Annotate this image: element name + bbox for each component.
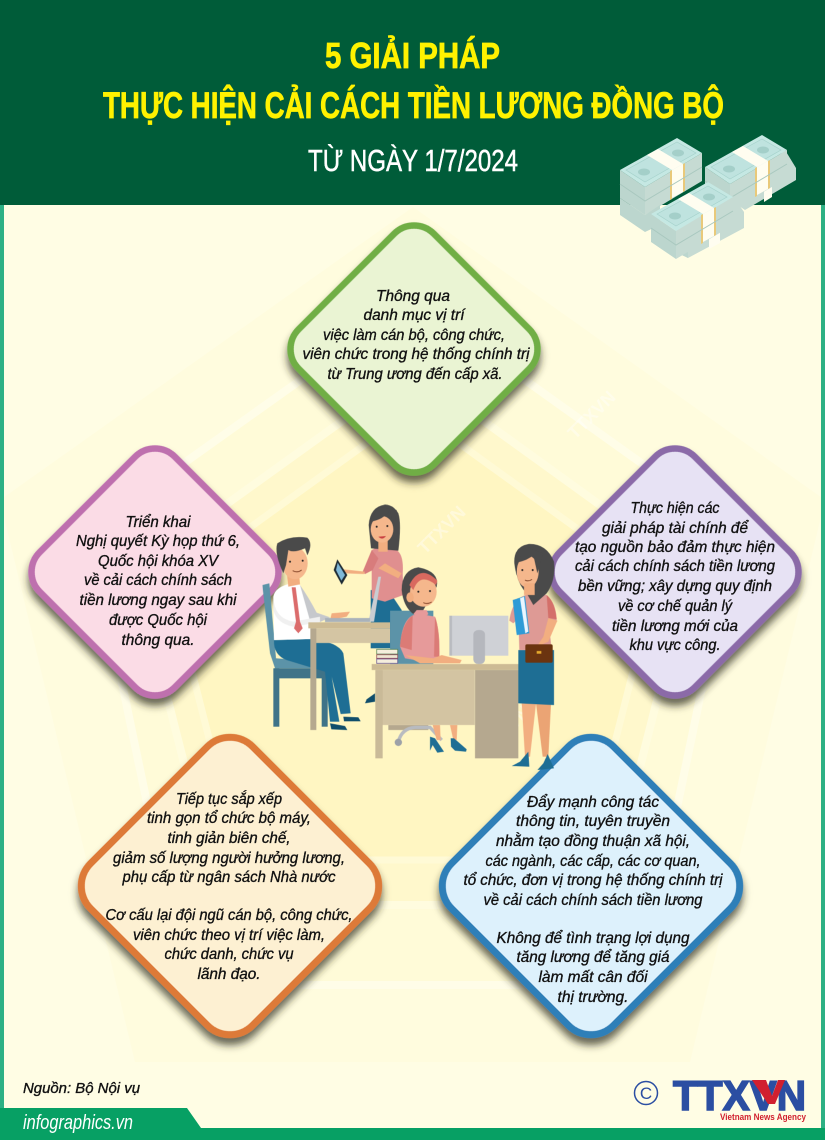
text block: bottom-right solution: [464, 793, 723, 1006]
text block: left solution: Triển khai: [126, 513, 191, 531]
panel: bottom-right solution (blue): [429, 724, 753, 1048]
logo wordmark: TTXVN: [673, 1072, 806, 1119]
header band: [0, 0, 825, 205]
watermarks: TTXVN: [414, 502, 470, 558]
text block: bottom-left solution: viên chức theo vị trí việc làm,: [133, 927, 325, 944]
panel: top solution (green): [279, 214, 549, 484]
icon: copyright: C: [640, 1084, 652, 1103]
text block: top solution: từ Trung ương đến cấp xã.: [328, 366, 502, 383]
text block: left solution: Nghị quyết Kỳ họp thứ 6,: [76, 533, 240, 550]
text block: bottom-right solution: tổ chức, đơn vị trong hệ thống chính trị: [464, 871, 723, 889]
text block: right solution: [575, 500, 775, 654]
diamond: purple: [540, 437, 810, 707]
text block: bottom-left solution: chức danh, chức vụ: [164, 946, 294, 963]
illustration: office workers: [262, 505, 557, 770]
logo: TTXVN: [634, 1072, 807, 1123]
diamond: orange: [68, 724, 392, 1048]
text block: left solution: về cải cách chính sách: [84, 572, 232, 589]
text block: bottom-right solution: về cải cách chính sách tiền lương: [484, 892, 703, 909]
watermarks: [414, 387, 620, 758]
text block: bottom-right solution: nhằm tạo đồng thuận xã hội,: [496, 831, 690, 850]
text block: bottom-left solution: phụ cấp từ ngân sách Nhà nước: [122, 869, 336, 886]
icon: stacks of money: [620, 135, 796, 259]
text block: bottom-left solution: giảm số lượng người hưởng lương,: [113, 850, 345, 867]
text block: right solution: khu vực công.: [630, 637, 720, 654]
text block: bottom-left solution: tinh gọn tổ chức bộ máy,: [147, 809, 311, 827]
text block: top solution: việc làm cán bộ, công chức,: [323, 327, 505, 344]
icon: copyright: [634, 1082, 658, 1104]
text block: top solution: danh mục vị trí: [364, 307, 466, 324]
logo tagline: Vietnam News Agency: [720, 1112, 807, 1123]
text block: bottom-right solution: làm mất cân đối: [538, 969, 648, 986]
title line 1: 5 GIẢI PHÁP: [325, 35, 500, 76]
panel: right solution (purple): [540, 437, 810, 707]
text block: bottom-left solution: Cơ cấu lại đội ngũ cán bộ, công chức,: [106, 907, 352, 924]
diamond: green: [279, 214, 549, 484]
text block: right solution: tạo nguồn bảo đảm thực hiện: [575, 539, 775, 556]
text block: left solution: Quốc hội khóa XV: [98, 553, 219, 570]
watermarks: TTXVN: [564, 387, 620, 443]
man on chair: [262, 537, 361, 730]
logo accent: [752, 1080, 785, 1104]
text block: right solution: bền vững; xây dựng quy định: [578, 578, 772, 595]
text block: bottom-left solution: lãnh đạo.: [198, 966, 260, 983]
subtitle date: TỪ NGÀY 1/7/2024: [308, 143, 518, 178]
text block: bottom-right solution: thị trường.: [558, 989, 628, 1006]
woman with books and bag: [509, 544, 557, 770]
text block: right solution: Thực hiện các: [630, 500, 720, 517]
source note: Nguồn: Bộ Nội vụ: [23, 1080, 141, 1097]
seated woman at desk: [372, 567, 519, 758]
panel: bottom-left solution (orange): [68, 724, 392, 1048]
diamond: blue: [429, 724, 753, 1048]
text block: right solution: giải pháp tài chính để: [602, 519, 749, 537]
title: [103, 35, 724, 178]
text block: bottom-right solution: tăng lương để tăng giá: [516, 948, 670, 966]
text block: top solution: viên chức trong hệ thống chính trị: [302, 346, 530, 363]
text block: bottom-right solution: Không để tình trạng lợi dụng: [496, 929, 690, 947]
text block: bottom-right solution: Đẩy mạnh công tác: [527, 793, 659, 811]
footer band: [0, 1108, 825, 1140]
text block: right solution: tiền lương mới của: [612, 618, 738, 635]
desk with laptop: [308, 577, 390, 730]
text block: bottom-right solution: thông tin, tuyên truyền: [516, 813, 670, 830]
panel: left solution (pink): [20, 437, 290, 707]
text block: top solution: Thông qua: [376, 288, 450, 305]
text block: bottom-left solution: tinh giản biên chế,: [168, 830, 290, 847]
text block: right solution: cải cách chính sách tiền lương: [575, 558, 775, 575]
text block: bottom-left solution: Tiếp tục sắp xếp: [176, 789, 282, 808]
footer site name: infographics.vn: [23, 1112, 133, 1134]
text block: bottom-left solution: [106, 789, 352, 983]
text block: left solution: [76, 513, 240, 649]
diamond: pink: [20, 437, 290, 707]
text block: right solution: về cơ chế quản lý: [618, 598, 733, 615]
standing woman with tablet: [334, 505, 403, 703]
text block: left solution: được Quốc hội: [109, 612, 207, 629]
text block: left solution: tiền lương ngay sau khi: [80, 592, 237, 609]
text block: top solution: [302, 288, 530, 383]
text block: bottom-right solution: các ngành, các cấp, các cơ quan,: [486, 853, 700, 870]
text block: left solution: thông qua.: [122, 632, 194, 649]
watermarks: TTXVN: [479, 702, 535, 758]
